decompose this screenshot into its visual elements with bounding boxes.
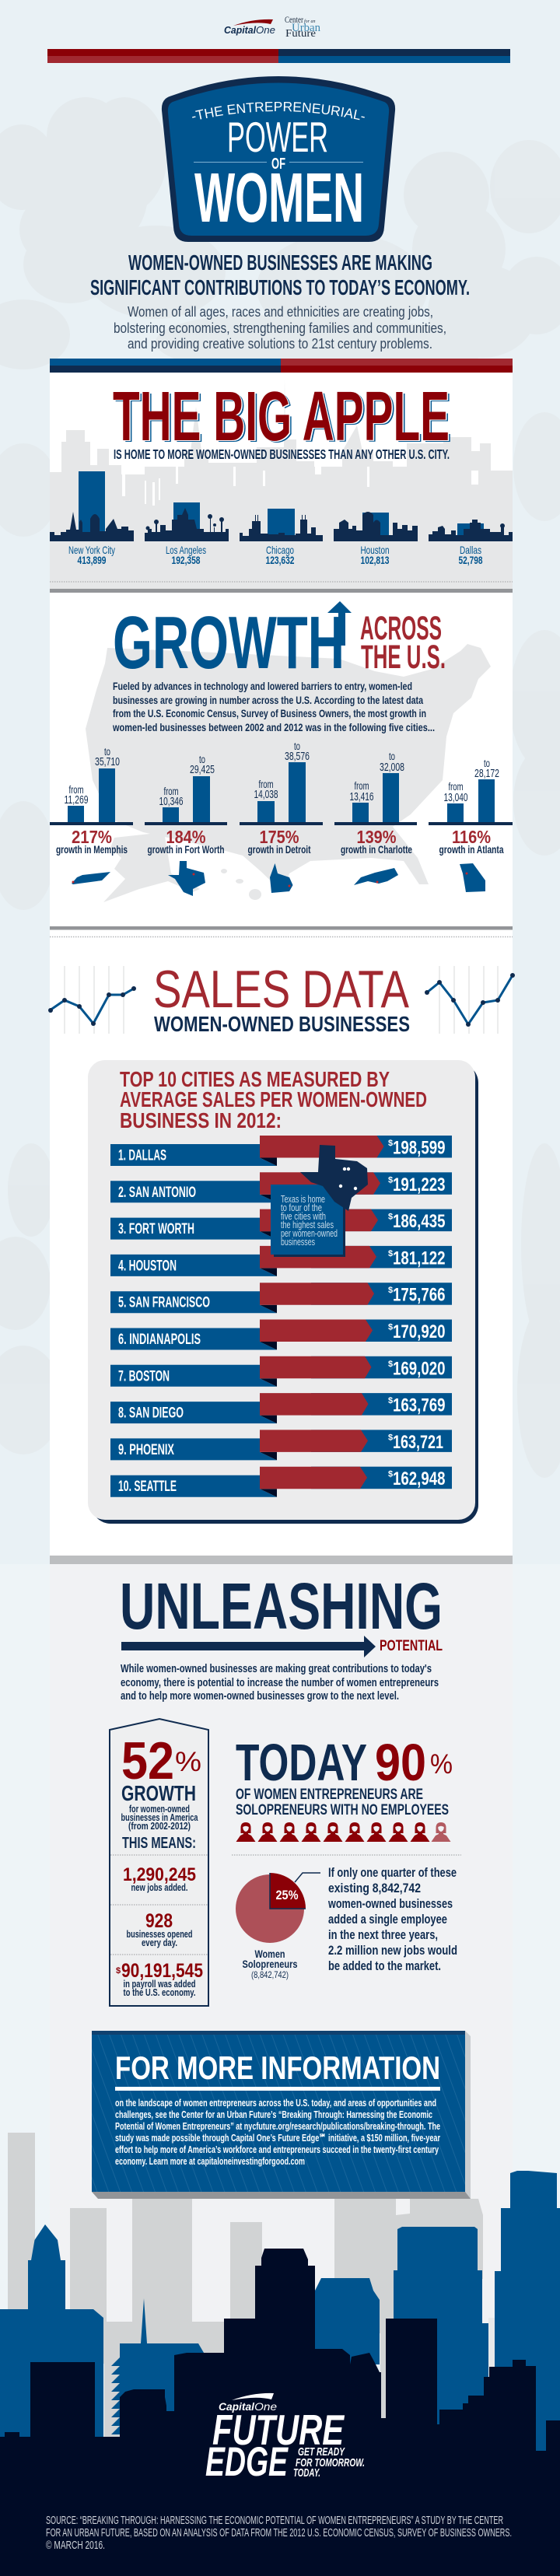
panel: unleashing potential: [50, 1564, 513, 2342]
title: women: WOMEN: [194, 159, 364, 237]
background skyline: [50, 379, 513, 589]
row 3: 3. FORT WORTH: [118, 1221, 194, 1237]
information paragraph: challenges, see the Center for an Urban Future’s “Breaking Through: Harnessing the Economic: [115, 2109, 432, 2120]
growth paragraph: from the U.S. Economic Census, Survey of Business Owners, the most growth in: [113, 707, 426, 719]
city bar: dallas: [429, 520, 513, 566]
city bar: houston: [334, 512, 418, 566]
city skyline: dark foreground: [0, 2249, 560, 2576]
solopreneur paragraph: in the next three years,: [328, 1927, 438, 1942]
stat: businesses opened: businesses opened: [126, 1929, 193, 1940]
city bar: dallas: Dallas: [460, 544, 481, 556]
row 8: 8. SAN DIEGO: [118, 1405, 184, 1422]
row 10: $: [388, 1470, 393, 1479]
city bar: houston: 102,813: [361, 554, 390, 566]
chart: fort worth: [145, 754, 227, 896]
city skyline: gray towers: [8, 2133, 495, 2438]
chart: fort worth: to: [199, 754, 205, 765]
row 3: $: [388, 1213, 393, 1222]
logo: future edge: FOR TOMORROW.: [296, 2456, 365, 2469]
label: growth: GROWTH: [121, 1781, 196, 1805]
row 1: [110, 1136, 452, 1166]
background skyline gaps: [122, 467, 478, 506]
row 1: $: [388, 1139, 393, 1148]
solopreneur paragraph: 2.2 million new jobs would: [328, 1943, 457, 1958]
logo: future edge: GET READY: [298, 2445, 345, 2459]
city bar: chicago: [240, 509, 323, 566]
chart: atlanta: from: [448, 781, 464, 793]
row 10: 162,948: [393, 1468, 445, 1489]
city bar: los angeles: [145, 502, 229, 566]
callout text: five cities with: [281, 1211, 326, 1222]
chart: memphis: growth in Memphis: [56, 843, 128, 856]
city bar: new york: 413,899: [78, 554, 107, 566]
unleashing paragraph: economy, there is potential to increase the number of women entrepreneurs: [121, 1677, 439, 1689]
pie chart: solopreneurs: [236, 1873, 320, 1980]
row 4: [110, 1246, 452, 1276]
city skyline: blue towers: [0, 2171, 560, 2458]
stat: payroll: in payroll was added: [123, 1979, 196, 1990]
description: businesses in America: [121, 1811, 198, 1823]
top stripe: [47, 49, 510, 63]
row 8: [110, 1393, 452, 1423]
chart: fort worth: growth in Fort Worth: [148, 843, 224, 856]
description: for women-owned: [129, 1803, 190, 1815]
title: of: OF: [271, 156, 285, 173]
chart: fort worth: 184%: [166, 827, 205, 847]
pie chart: solopreneurs: 25%: [275, 1888, 299, 1902]
logo: Center for an Urban Future: Urban: [292, 22, 320, 34]
panel: growth across the us: [50, 601, 513, 936]
stat: businesses opened: every day.: [142, 1937, 177, 1948]
line chart: left: [48, 966, 136, 1034]
row 9: [110, 1430, 452, 1460]
row 4: $: [388, 1249, 393, 1258]
bottom page tint: right margin: [513, 1564, 560, 2342]
white main panel: [50, 373, 513, 1556]
intro paragraph: Women of all ages, races and ethnicities are creating jobs,: [128, 304, 433, 320]
city bar: houston: Houston: [361, 544, 389, 556]
chart: detroit: 14,038: [254, 789, 278, 801]
logo: future edge: EDGE: [205, 2439, 289, 2485]
label: this means: THIS MEANS:: [122, 1835, 196, 1852]
chart: charlotte: growth in Charlotte: [341, 843, 412, 856]
chart: memphis: 11,269: [64, 794, 89, 807]
row 4: 4. HOUSTON: [118, 1258, 177, 1274]
stat: businesses opened: [126, 1910, 193, 1948]
stat: payroll: 90,191,545: [121, 1960, 203, 1982]
unleashing paragraph: [121, 1663, 439, 1703]
pie chart: solopreneurs: Women: [255, 1948, 285, 1960]
row 10: 10. SEATTLE: [118, 1479, 177, 1495]
callout text: Texas is home: [281, 1194, 325, 1205]
row 5: 5. SAN FRANCISCO: [118, 1295, 210, 1311]
logo: future edge: TODAY.: [293, 2466, 320, 2480]
row 5: $: [388, 1286, 393, 1295]
row 10: [110, 1467, 452, 1497]
solopreneur paragraph: added a single employee: [328, 1912, 447, 1927]
city bar: new york: [50, 471, 134, 566]
callout: texas: [271, 1145, 368, 1257]
row 2: 2. SAN ANTONIO: [118, 1185, 196, 1201]
logo: Capital One: Capital: [224, 24, 256, 36]
heading: across the us: ACROSS: [360, 610, 442, 647]
chart: charlotte: to: [389, 751, 395, 762]
icon: michigan: [270, 863, 292, 893]
subheading: solopreneurs: OF WOMEN ENTREPRENEURS ARE: [236, 1786, 423, 1803]
intro heading: [90, 250, 470, 299]
icon: texas: [168, 861, 205, 896]
panel: big apple: [50, 378, 513, 593]
title: power: POWER: [227, 113, 328, 161]
logo: Center for an Urban Future: for an: [304, 19, 316, 24]
stat: 52%: %: [175, 1747, 201, 1777]
row 2: 191,223: [393, 1174, 445, 1195]
row 9: 9. PHOENIX: [118, 1442, 174, 1458]
logo: capital one white: Capital: [219, 2401, 254, 2413]
logo: future edge: [205, 2406, 365, 2485]
second stripe: [50, 359, 513, 373]
chart: atlanta: growth in Atlanta: [439, 843, 504, 856]
unleashing paragraph: While women-owned businesses are making great contributions to today's: [121, 1663, 432, 1675]
row 8: $: [388, 1396, 393, 1405]
chart: detroit: to: [294, 740, 300, 752]
solopreneur paragraph: If only one quarter of these: [328, 1865, 457, 1880]
logo: future edge: FUTURE: [212, 2406, 345, 2454]
chart: fort worth: 29,425: [190, 764, 215, 776]
solopreneur paragraph: be added to the market.: [328, 1958, 441, 1973]
stat: payroll: $: [116, 1966, 121, 1976]
unleashing paragraph: and to help more women-owned businesses grow to the next level.: [121, 1690, 399, 1703]
row 2: [110, 1172, 452, 1202]
growth paragraph: Fueled by advances in technology and lowered barriers to entry, women-led: [113, 680, 412, 692]
row 7: [110, 1356, 452, 1387]
chart: charlotte: 32,008: [380, 761, 404, 774]
chart: charlotte: from: [355, 780, 369, 792]
panel: sales data: [48, 960, 515, 1564]
city bar: dallas: 52,798: [459, 554, 483, 566]
title: the entrepreneurial: -THE ENTREPRENEURIAL-: [192, 102, 365, 120]
description: (from 2002-2012): [128, 1820, 191, 1832]
row 3: [110, 1209, 452, 1240]
subheading: solopreneurs: [236, 1786, 449, 1818]
heading: across the us: [360, 610, 446, 676]
callout text: [281, 1194, 338, 1248]
intro paragraph: [114, 304, 446, 352]
row 6: $: [388, 1322, 393, 1332]
stat: new jobs: 1,290,245: [123, 1864, 196, 1885]
callout text: businesses: [281, 1237, 315, 1248]
heading: sales data: SALES DATA: [153, 960, 410, 1019]
chart: charlotte: 139%: [356, 827, 397, 847]
chart: atlanta: 28,172: [474, 768, 499, 780]
city bar: chicago: Chicago: [266, 544, 294, 556]
line chart: right: [425, 966, 515, 1034]
chart: fort worth: 10,346: [159, 796, 184, 808]
row 9: 163,721: [393, 1432, 443, 1453]
background crowd silhouettes: [0, 97, 560, 1478]
chart: atlanta: to: [484, 758, 490, 769]
logos: [224, 14, 320, 40]
city bar: chicago: 123,632: [266, 554, 295, 566]
callout text: per women-owned: [281, 1228, 338, 1239]
icons: ten women: [236, 1822, 451, 1842]
row 1: 1. DALLAS: [118, 1148, 166, 1164]
card heading: BUSINESS IN 2012:: [120, 1108, 282, 1132]
icon: north carolina: [354, 868, 398, 885]
row 8: 163,769: [393, 1395, 445, 1416]
information paragraph: [115, 2097, 440, 2167]
heading: across the us: THE U.S.: [361, 639, 446, 676]
chart: memphis: from: [68, 784, 84, 796]
city bar: los angeles: 192,358: [171, 554, 201, 566]
row 5: [110, 1283, 452, 1313]
solopreneur paragraph: existing 8,842,742: [328, 1881, 421, 1895]
title badge: [162, 76, 395, 242]
bottom page tint: left margin: [0, 1564, 50, 2342]
stat: new jobs: [123, 1864, 196, 1893]
row 1: 198,599: [393, 1137, 445, 1159]
heading: for more information: FOR MORE INFORMATION: [115, 2049, 440, 2086]
stat: new jobs: new jobs added.: [131, 1882, 188, 1893]
row 6: 170,920: [393, 1321, 445, 1342]
label: potential: POTENTIAL: [380, 1638, 443, 1654]
panel: 52% growth: [110, 1719, 208, 2006]
pie chart: solopreneurs: Solopreneurs: [243, 1958, 298, 1970]
icon: tennessee: [72, 872, 110, 884]
stat: payroll: [116, 1960, 203, 1998]
logo: capital one white: [219, 2393, 277, 2413]
row 3: 186,435: [393, 1211, 445, 1232]
chart: atlanta: 13,040: [443, 792, 468, 804]
callout text: to four of the: [281, 1202, 322, 1213]
intro paragraph: bolstering economies, strengthening families and communities,: [114, 320, 446, 336]
stat: 52%: 52: [121, 1731, 174, 1790]
chart: charlotte: 13,416: [350, 791, 373, 803]
card: top 10 cities: [88, 1060, 478, 1524]
description: [121, 1803, 198, 1832]
chart: memphis: 217%: [72, 827, 112, 847]
solopreneur paragraph: [327, 1865, 457, 1973]
arrow: potential: [121, 1636, 376, 1657]
card heading: [120, 1067, 427, 1132]
chart: detroit: 38,576: [285, 751, 310, 763]
chart: atlanta: [429, 758, 513, 892]
panel: for more information: [92, 2031, 471, 2199]
stat: payroll: to the U.S. economy.: [123, 1987, 196, 1998]
pie chart: solopreneurs: (8,842,742): [251, 1969, 289, 1980]
logo: Capital One: One: [256, 24, 275, 36]
row 4: 181,122: [393, 1248, 445, 1269]
chart: detroit: from: [258, 779, 274, 790]
subheading: women-owned businesses: WOMEN-OWNED BUSINESSES: [154, 1012, 410, 1036]
chart: detroit: [240, 740, 323, 893]
callout text: the highest sales: [281, 1220, 334, 1230]
icon: georgia: [460, 863, 485, 892]
growth paragraph: businesses are growing in number across the U.S. According to the latest data: [113, 694, 423, 706]
logo: Capital One: [224, 19, 275, 36]
logo: Center for an Urban Future: Future: [285, 28, 316, 40]
heading: unleashing: UNLEASHING: [120, 1570, 443, 1643]
row 7: $: [388, 1360, 393, 1369]
card heading: AVERAGE SALES PER WOMEN-OWNED: [120, 1087, 427, 1111]
map: texas: [300, 1145, 368, 1211]
row 6: [110, 1319, 452, 1350]
chart: memphis: [50, 746, 133, 884]
solopreneur paragraph: women-owned businesses: [327, 1896, 453, 1911]
row 2: $: [388, 1175, 393, 1185]
subheading: solopreneurs: SOLOPRENEURS WITH NO EMPLOYEES: [236, 1801, 449, 1818]
row 6: 6. INDIANAPOLIS: [118, 1332, 201, 1348]
heading: today 90%: TODAY: [236, 1734, 367, 1792]
source note: © MARCH 2016.: [46, 2539, 105, 2552]
chart: memphis: to: [104, 746, 110, 758]
logo: Center for an Urban Future: Center: [285, 14, 303, 25]
card heading: TOP 10 CITIES AS MEASURED BY: [120, 1067, 390, 1091]
logo: capital one white: One: [254, 2401, 277, 2413]
row 9: $: [388, 1433, 393, 1442]
chart: atlanta: 116%: [452, 827, 491, 847]
city bar: los angeles: Los Angeles: [166, 544, 206, 556]
heading: today 90%: 90: [375, 1734, 426, 1792]
intro paragraph: and providing creative solutions to 21st century problems.: [128, 336, 432, 352]
chart: detroit: growth in Detroit: [247, 843, 311, 856]
row 5: 175,766: [393, 1285, 445, 1306]
logo: Center for an Urban Future: [285, 14, 320, 40]
chart: detroit: 175%: [260, 827, 299, 847]
growth paragraph: women-led businesses between 2002 and 2012 was in the following five cities...: [112, 721, 435, 733]
chart: charlotte: [334, 751, 417, 885]
icon: growth arrow: [327, 601, 352, 646]
chart: memphis: 35,710: [95, 756, 120, 768]
us map background: [86, 644, 491, 902]
stat: businesses opened: 928: [145, 1910, 173, 1932]
source note: [46, 2515, 512, 2552]
heading: growth: GROWTH: [113, 601, 345, 684]
row 7: 169,020: [393, 1358, 445, 1379]
chart: fort worth: from: [163, 786, 179, 797]
city bar: new york: New York City: [68, 544, 115, 556]
growth paragraph: [112, 680, 435, 733]
information paragraph: economy. Learn more at capitaloneinvestingforgood.com: [115, 2155, 305, 2167]
heading: today 90%: %: [430, 1749, 453, 1780]
row 7: 7. BOSTON: [118, 1368, 170, 1384]
